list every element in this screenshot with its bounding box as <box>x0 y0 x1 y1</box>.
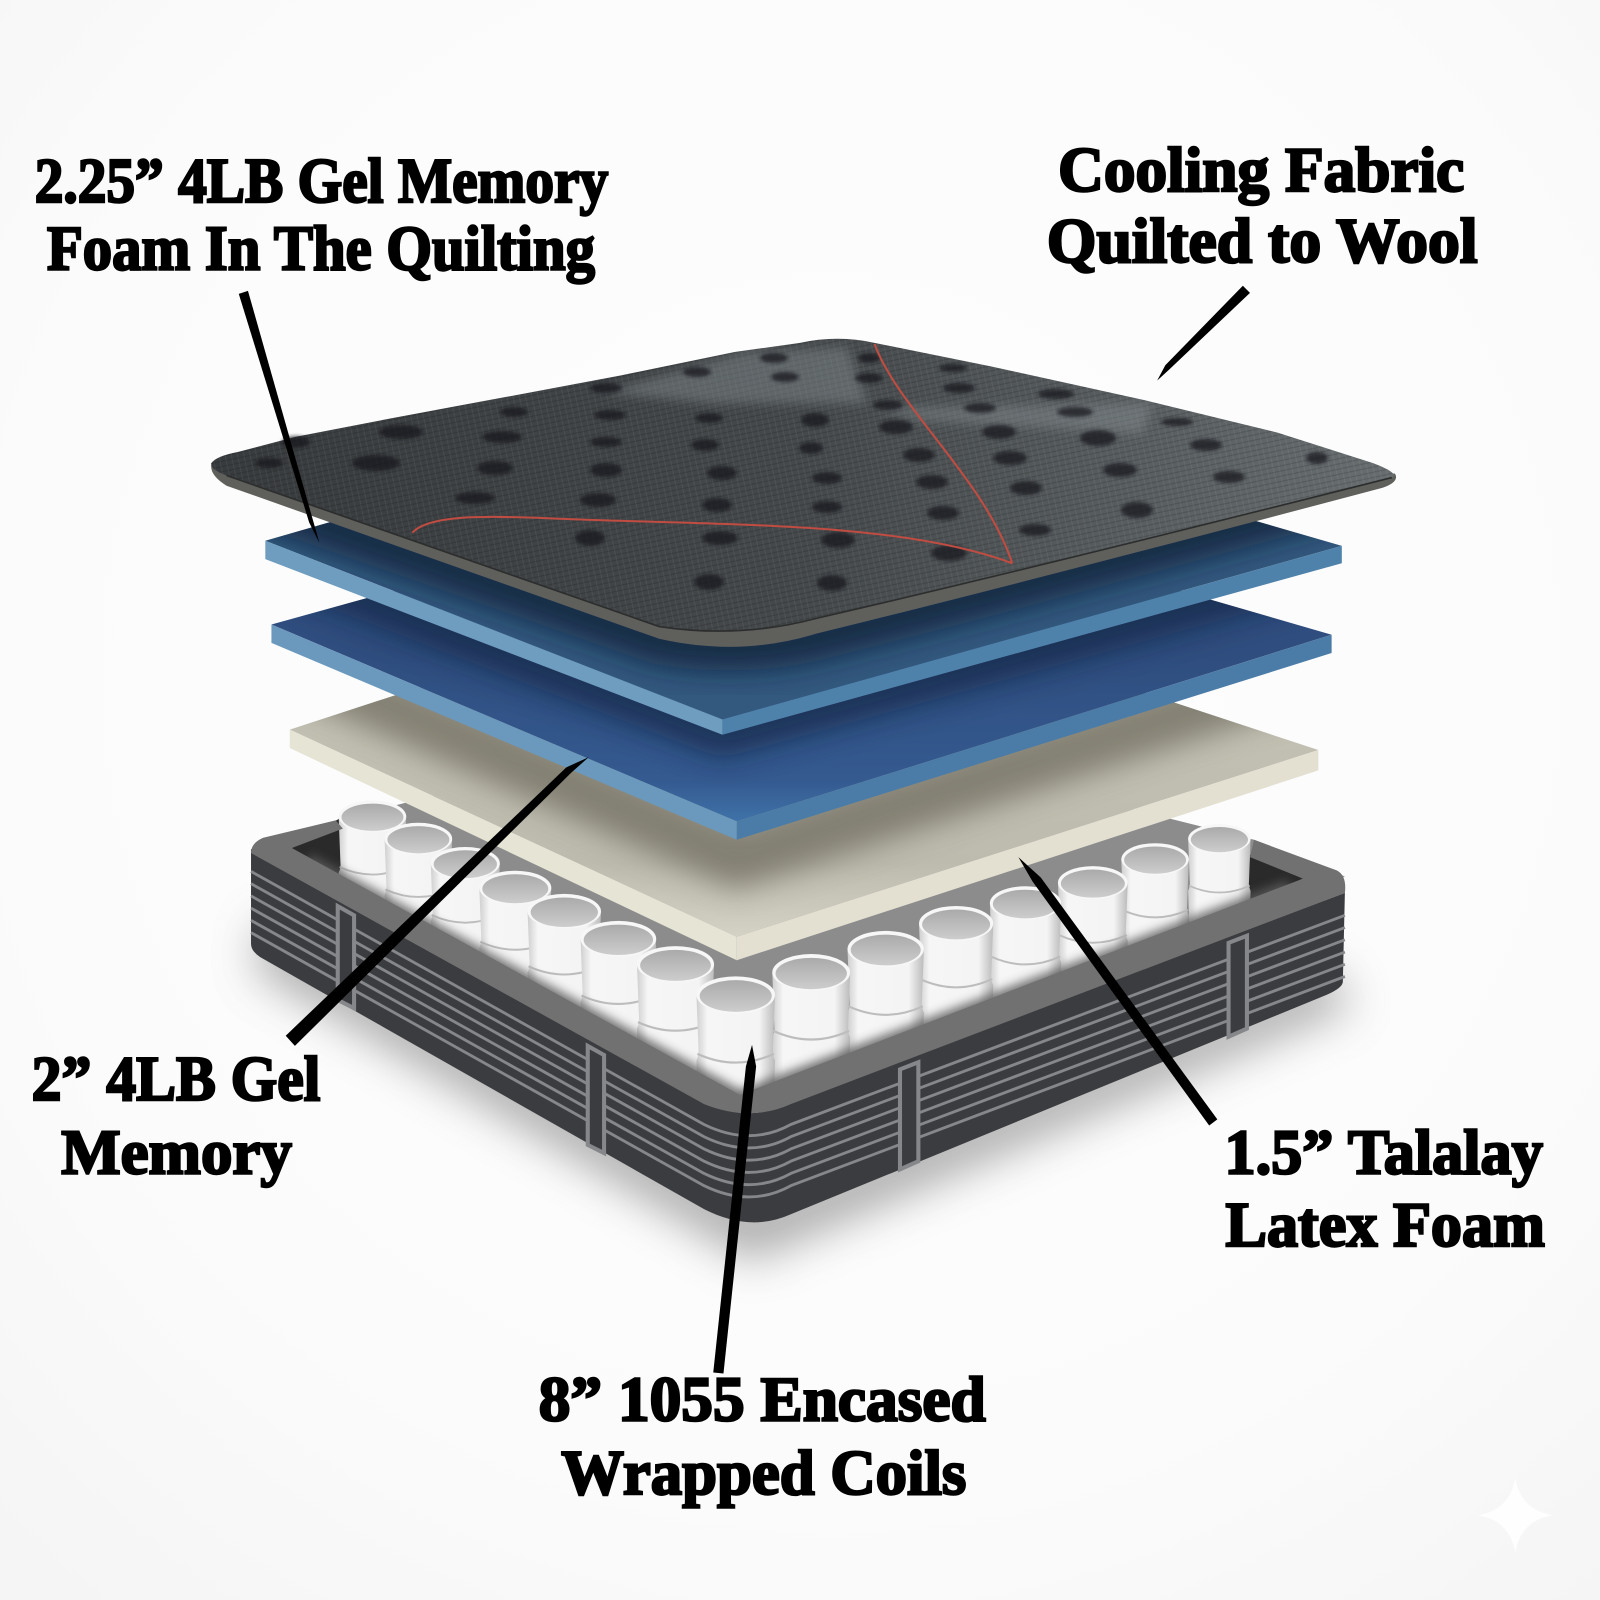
icon: sparkle watermark <box>1478 1478 1553 1553</box>
ground shadow <box>255 918 1352 1260</box>
label: wrapped coils: 8” 1055 Encased <box>539 1364 986 1434</box>
vertical handles <box>338 906 1247 1169</box>
label: cooling fabric: Cooling Fabric <box>1058 135 1464 205</box>
pad surface <box>211 339 1394 631</box>
upper gel memory layer <box>265 521 1342 735</box>
label: latex foam: Latex Foam <box>1226 1190 1545 1260</box>
base side panel <box>251 849 1345 1222</box>
leader: quilting foam <box>239 291 319 543</box>
label: 2 inch gel memory: Memory <box>61 1117 292 1187</box>
side stripes <box>251 871 1345 1197</box>
back quilt panel highlight <box>602 347 1153 434</box>
label: cooling fabric: Quilted to Wool <box>1047 206 1478 276</box>
label: wrapped coils <box>539 1364 986 1508</box>
label: gel memory foam in quilting: 2.25” 4LB Gel Memory <box>35 146 608 216</box>
pad piping <box>227 476 1392 631</box>
label: gel memory foam in quilting: Foam In The Quilting <box>47 213 595 283</box>
leader: latex <box>1018 857 1217 1126</box>
base well <box>259 714 1345 1112</box>
leader: cooling fabric <box>1157 286 1250 381</box>
label: cooling fabric <box>1047 135 1478 276</box>
label: latex foam <box>1224 1117 1545 1260</box>
lower gel memory layer <box>271 590 1332 840</box>
label: latex foam: 1.5” Talalay <box>1224 1117 1543 1187</box>
label: 2 inch gel memory: 2” 4LB Gel <box>32 1044 320 1114</box>
quilted top panel <box>211 339 1396 647</box>
label: 2 inch gel memory <box>32 1044 320 1187</box>
fabric weave <box>211 339 1394 631</box>
red stitching <box>412 344 1012 563</box>
coil foot shadow <box>306 863 1291 1101</box>
coils <box>306 800 1291 1131</box>
pad edge <box>211 465 1396 647</box>
leader: coils <box>713 1045 756 1373</box>
base: encased coil unit <box>251 714 1345 1222</box>
label: gel memory foam in quilting <box>35 146 608 283</box>
latex foam layer <box>290 687 1318 960</box>
base rim <box>251 820 1345 1113</box>
leader: gel memory <box>286 757 589 1046</box>
label: wrapped coils: Wrapped Coils <box>561 1438 966 1508</box>
tufts <box>255 353 1328 591</box>
